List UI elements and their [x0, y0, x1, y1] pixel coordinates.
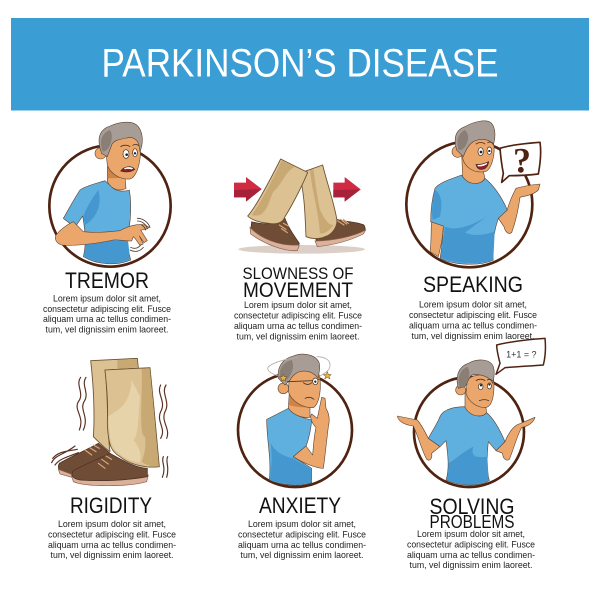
text block: slowness of movement: tum, vel dignissim enim laoreet. [236, 332, 360, 342]
heading: rigidity: RIGIDITY [70, 493, 152, 518]
speech bubble: question mark: ? [513, 141, 531, 181]
text block: rigidity: tum, vel dignissim enim laoreet. [50, 550, 174, 560]
text block: rigidity [48, 519, 176, 560]
panel: solving problems [397, 338, 545, 570]
text block: slowness of movement: consectetur adipiscing elit. Fusce [234, 310, 362, 320]
text block: anxiety: aliquam urna ac tellus condimen- [238, 540, 366, 550]
text block: speaking [409, 300, 537, 341]
text block: tremor: aliquam urna ac tellus condimen- [43, 314, 171, 324]
illustration: man speaking with question bubble [406, 121, 541, 267]
illustration: man with tremor [49, 122, 171, 267]
text block: speaking: aliquam urna ac tellus condimen- [409, 320, 537, 330]
text block: speaking: Lorem ipsum dolor sit amet, [419, 300, 527, 310]
illustration: walking legs with arrows [234, 159, 366, 254]
text block: solving problems: consectetur adipiscing elit. Fusce [407, 540, 535, 550]
panel: slowness of movement [234, 159, 366, 342]
text block: solving problems: Lorem ipsum dolor sit amet, [417, 529, 525, 539]
text block: anxiety: consectetur adipiscing elit. Fusce [238, 530, 366, 540]
text block: tremor [43, 294, 171, 334]
text block: speaking: consectetur adipiscing elit. Fusce [409, 310, 537, 320]
speech bubble: question mark [500, 141, 541, 182]
text block: speaking: tum, vel dignissim enim laoreet. [412, 331, 534, 341]
dizzy halo with stars [268, 357, 331, 381]
panel: rigidity [48, 358, 176, 560]
illustration: stiff legs and shoes [52, 358, 168, 486]
text block: solving problems: tum, vel dignissim enim laoreet. [410, 560, 532, 570]
panel: anxiety [238, 354, 366, 560]
illustration: shrugging man with math bubble [397, 338, 545, 487]
text block: solving problems [407, 529, 535, 570]
panel: speaking [406, 121, 541, 341]
heading: anxiety: ANXIETY [259, 493, 341, 518]
text block: slowness of movement: Lorem ipsum dolor sit amet, [244, 300, 352, 310]
text block: anxiety [238, 519, 366, 560]
illustration: dizzy man in circle [238, 354, 352, 487]
text block: anxiety: tum, vel dignissim enim laoreet. [240, 550, 364, 560]
text block: anxiety: Lorem ipsum dolor sit amet, [248, 519, 356, 529]
heading: slowness of movement: MOVEMENT [243, 279, 353, 302]
heading: tremor: TREMOR [65, 268, 149, 293]
text block: rigidity: Lorem ipsum dolor sit amet, [58, 519, 166, 529]
heading: solving problems: PROBLEMS [430, 512, 514, 532]
heading: solving problems: SOLVING [430, 494, 514, 519]
title: PARKINSON’S DISEASE [102, 42, 498, 86]
text block: solving problems: aliquam urna ac tellus condimen- [407, 550, 535, 560]
heading: speaking: SPEAKING [423, 272, 523, 297]
text block: tremor: Lorem ipsum dolor sit amet, [53, 294, 161, 304]
text block: slowness of movement: aliquam urna ac tellus condimen- [234, 321, 362, 331]
speech bubble: 1+1 = ? [496, 338, 545, 374]
heading: solving problems [430, 494, 514, 532]
header banner [11, 18, 589, 110]
text block: rigidity: aliquam urna ac tellus condimen- [48, 540, 176, 550]
text block: tremor: tum, vel dignissim enim laoreet. [46, 324, 168, 334]
heading: slowness of movement: SLOWNESS OF [242, 264, 354, 283]
text block: rigidity: consectetur adipiscing elit. Fusce [48, 530, 176, 540]
heading: slowness of movement [242, 264, 354, 302]
text block: tremor: consectetur adipiscing elit. Fusce [43, 304, 171, 314]
text block: slowness of movement [234, 300, 362, 342]
panel: tremor [43, 122, 171, 334]
speech bubble: 1+1 = ?: 1+1 = ? [506, 350, 537, 360]
